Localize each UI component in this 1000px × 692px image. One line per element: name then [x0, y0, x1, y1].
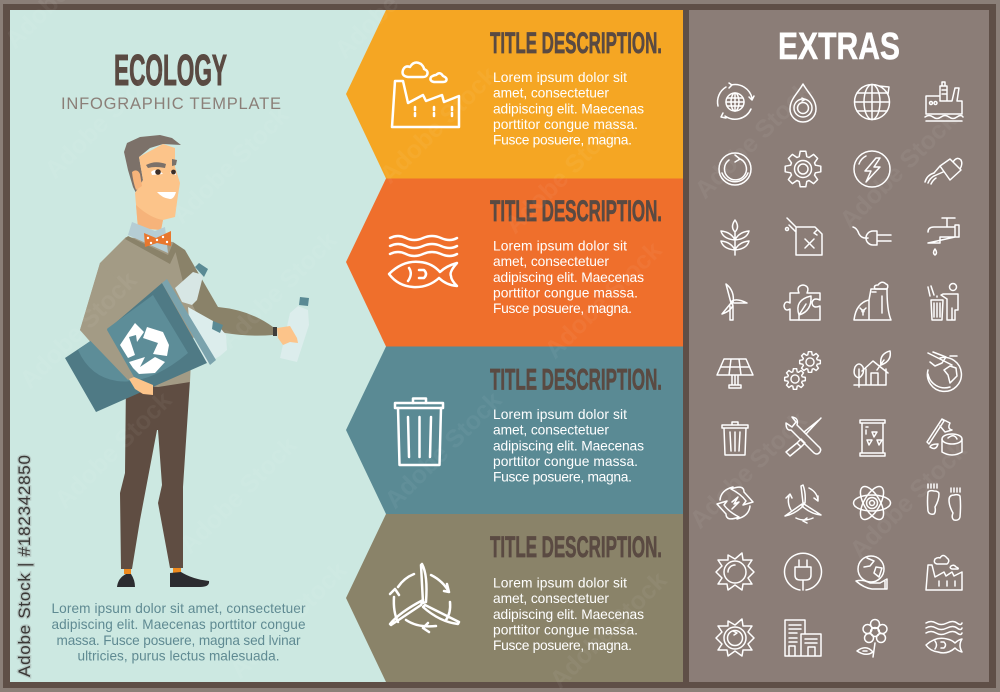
intro paragraph: massa. Fusce posuere, magna sed lvinar — [56, 633, 301, 648]
icon: watering can — [925, 158, 962, 184]
icon: factory — [392, 63, 459, 127]
body text: porttitor congue massa. — [493, 117, 638, 132]
intro paragraph: Lorem ipsum dolor sit amet, consectetuer — [52, 601, 306, 616]
icon: turbine with arrows — [785, 485, 821, 523]
watermark: repeated stock text: Adobe Stock — [374, 61, 502, 189]
body text: Fusce posuere, magna. — [493, 133, 632, 148]
watermark: repeated stock text: Adobe Stock — [499, 111, 627, 239]
body text: Fusce posuere, magna. — [493, 470, 632, 485]
body text: amet, consectetuer — [493, 591, 609, 606]
icon: puzzle piece with leaf — [784, 285, 820, 320]
heading: TITLE DESCRIPTION. — [490, 195, 662, 228]
icon: house with tree — [854, 351, 890, 387]
hand with bottle — [277, 326, 298, 345]
icon: sun — [716, 553, 754, 590]
icon: factory — [926, 556, 962, 590]
panel: intro with character — [10, 10, 390, 682]
icon: footprints — [928, 484, 960, 520]
body text: adipiscing elit. Maecenas — [493, 438, 644, 453]
watermark: repeated stock text: Adobe Stock — [49, 386, 177, 514]
body text: porttitor congue massa. — [493, 622, 638, 638]
watermark: repeated stock text: Adobe Stock — [684, 406, 812, 534]
heading: TITLE DESCRIPTION. — [490, 531, 662, 564]
heading: TITLE DESCRIPTION. — [490, 364, 662, 396]
sleeve over bin — [80, 263, 134, 380]
watermark: repeated stock text: Adobe Stock — [166, 101, 294, 229]
icon: trash can — [395, 398, 443, 465]
icon: globe in recycling arrows — [718, 83, 754, 119]
icon: plant — [721, 220, 749, 255]
right sleeve — [173, 242, 273, 336]
icon: plug in circle — [784, 553, 822, 590]
intro paragraph — [52, 601, 306, 664]
body text — [493, 576, 644, 653]
illustration: man holding recycling bin and bottle — [65, 135, 309, 587]
hand on bin — [129, 377, 153, 395]
panel: section 2 — [346, 178, 683, 346]
icon: hand holding globe — [856, 556, 887, 589]
panel: section 3 — [346, 346, 683, 514]
icon: gear with cycle — [785, 151, 821, 187]
sweater torso — [80, 237, 205, 387]
shoes — [117, 572, 209, 587]
body text — [493, 407, 644, 485]
icon: lightning in circle — [854, 151, 890, 187]
watermark: repeated stock text: Adobe Stock — [379, 386, 507, 514]
icon: person throwing trash — [928, 284, 958, 320]
body text: amet, consectetuer — [493, 254, 609, 269]
panel: section 1 — [346, 10, 683, 178]
icon: waves and fish — [926, 622, 962, 653]
icon: waves and fish — [389, 236, 457, 287]
icon: oil platform ship — [925, 82, 963, 121]
watermark: repeated stock text: Adobe Stock — [834, 106, 962, 234]
icon: solar panel — [717, 359, 753, 388]
watermark: repeated stock text: Adobe Stock — [174, 431, 302, 559]
facial details — [146, 159, 177, 168]
neck and face — [135, 144, 180, 230]
icon: globe with plane — [927, 352, 961, 391]
watermark: repeated stock text: Adobe Stock — [14, 266, 142, 394]
watermark: repeated stock text: Adobe Stock — [539, 236, 667, 364]
bow tie — [144, 231, 171, 247]
body text: amet, consectetuer — [493, 423, 609, 438]
hair — [124, 135, 181, 195]
icon: recycling arrows — [120, 323, 169, 374]
intro paragraph: ultricies, purus lectus malesuada. — [78, 648, 280, 664]
held bottle — [280, 306, 309, 362]
icon: nuclear plant — [854, 282, 891, 320]
watermark: repeated stock text: Adobe Stock — [844, 436, 972, 564]
watermark: repeated stock text: Adobe Stock — [689, 76, 817, 204]
icon: atom — [854, 483, 890, 523]
body text: Lorem ipsum dolor sit — [493, 70, 627, 85]
icon: wrench and screwdriver — [786, 417, 821, 456]
body text: amet, consectetuer — [493, 86, 609, 101]
icon: wind turbine with circular arrows — [390, 564, 459, 632]
title: ECOLOGY — [114, 46, 227, 95]
heading: TITLE DESCRIPTION. — [490, 27, 662, 60]
body text — [493, 238, 644, 316]
icon: radioactive barrel — [860, 420, 885, 456]
icon: globe with arrow — [854, 84, 890, 120]
intro paragraph: adipiscing elit. Maecenas porttitor congue — [52, 617, 306, 632]
watermark: repeated stock text: Adobe Stock — [39, 56, 167, 184]
body text: Lorem ipsum dolor sit — [493, 407, 627, 422]
icon: circular arrow — [719, 153, 751, 185]
body text: Fusce posuere, magna. — [493, 301, 632, 316]
body text: Fusce posuere, magna. — [493, 638, 632, 653]
watermark: stock credit: Adobe Stock | #182342850 — [15, 455, 34, 677]
watermark: repeated stock text: Adobe Stock — [214, 226, 342, 354]
icon: flower — [857, 620, 887, 657]
icon: city buildings — [785, 620, 821, 656]
socks — [124, 568, 181, 574]
collar — [128, 222, 168, 253]
body text: Lorem ipsum dolor sit — [493, 238, 627, 254]
body text — [493, 70, 644, 148]
heading: extras: EXTRAS — [778, 26, 900, 68]
icon: axe and tree stump — [927, 419, 962, 455]
icon: water drop with cycle — [790, 84, 816, 122]
body text: adipiscing elit. Maecenas — [493, 270, 644, 285]
icon: renewal arrows — [717, 487, 753, 519]
panel: extras — [689, 10, 989, 682]
icon: wind turbine — [722, 284, 747, 320]
watermark: repeated stock text: Adobe Stock — [544, 566, 672, 692]
recycling bin — [65, 279, 216, 412]
icon: electric plug — [853, 227, 891, 245]
icon: sun with spiral — [716, 619, 754, 656]
body text: porttitor congue massa. — [493, 454, 638, 469]
body text: Lorem ipsum dolor sit — [493, 576, 627, 590]
icon: trash can — [722, 422, 748, 455]
body text: porttitor congue massa. — [493, 286, 638, 300]
icon: fuel canister — [786, 218, 822, 255]
panel: section 4 — [346, 514, 683, 682]
trousers — [120, 380, 190, 569]
icon: gears — [785, 352, 820, 389]
body text: adipiscing elit. Maecenas — [493, 607, 644, 622]
plastic bottles in bin — [175, 263, 227, 363]
icon: water tap — [928, 218, 959, 255]
sweater neckline — [125, 236, 177, 264]
watermark: stock credit: Adobe Stock | #182342850 — [15, 455, 34, 677]
body text: adipiscing elit. Maecenas — [493, 101, 644, 116]
subtitle: INFOGRAPHIC TEMPLATE — [61, 95, 281, 113]
watermark: repeated stock text: Adobe Stock — [224, 556, 352, 684]
